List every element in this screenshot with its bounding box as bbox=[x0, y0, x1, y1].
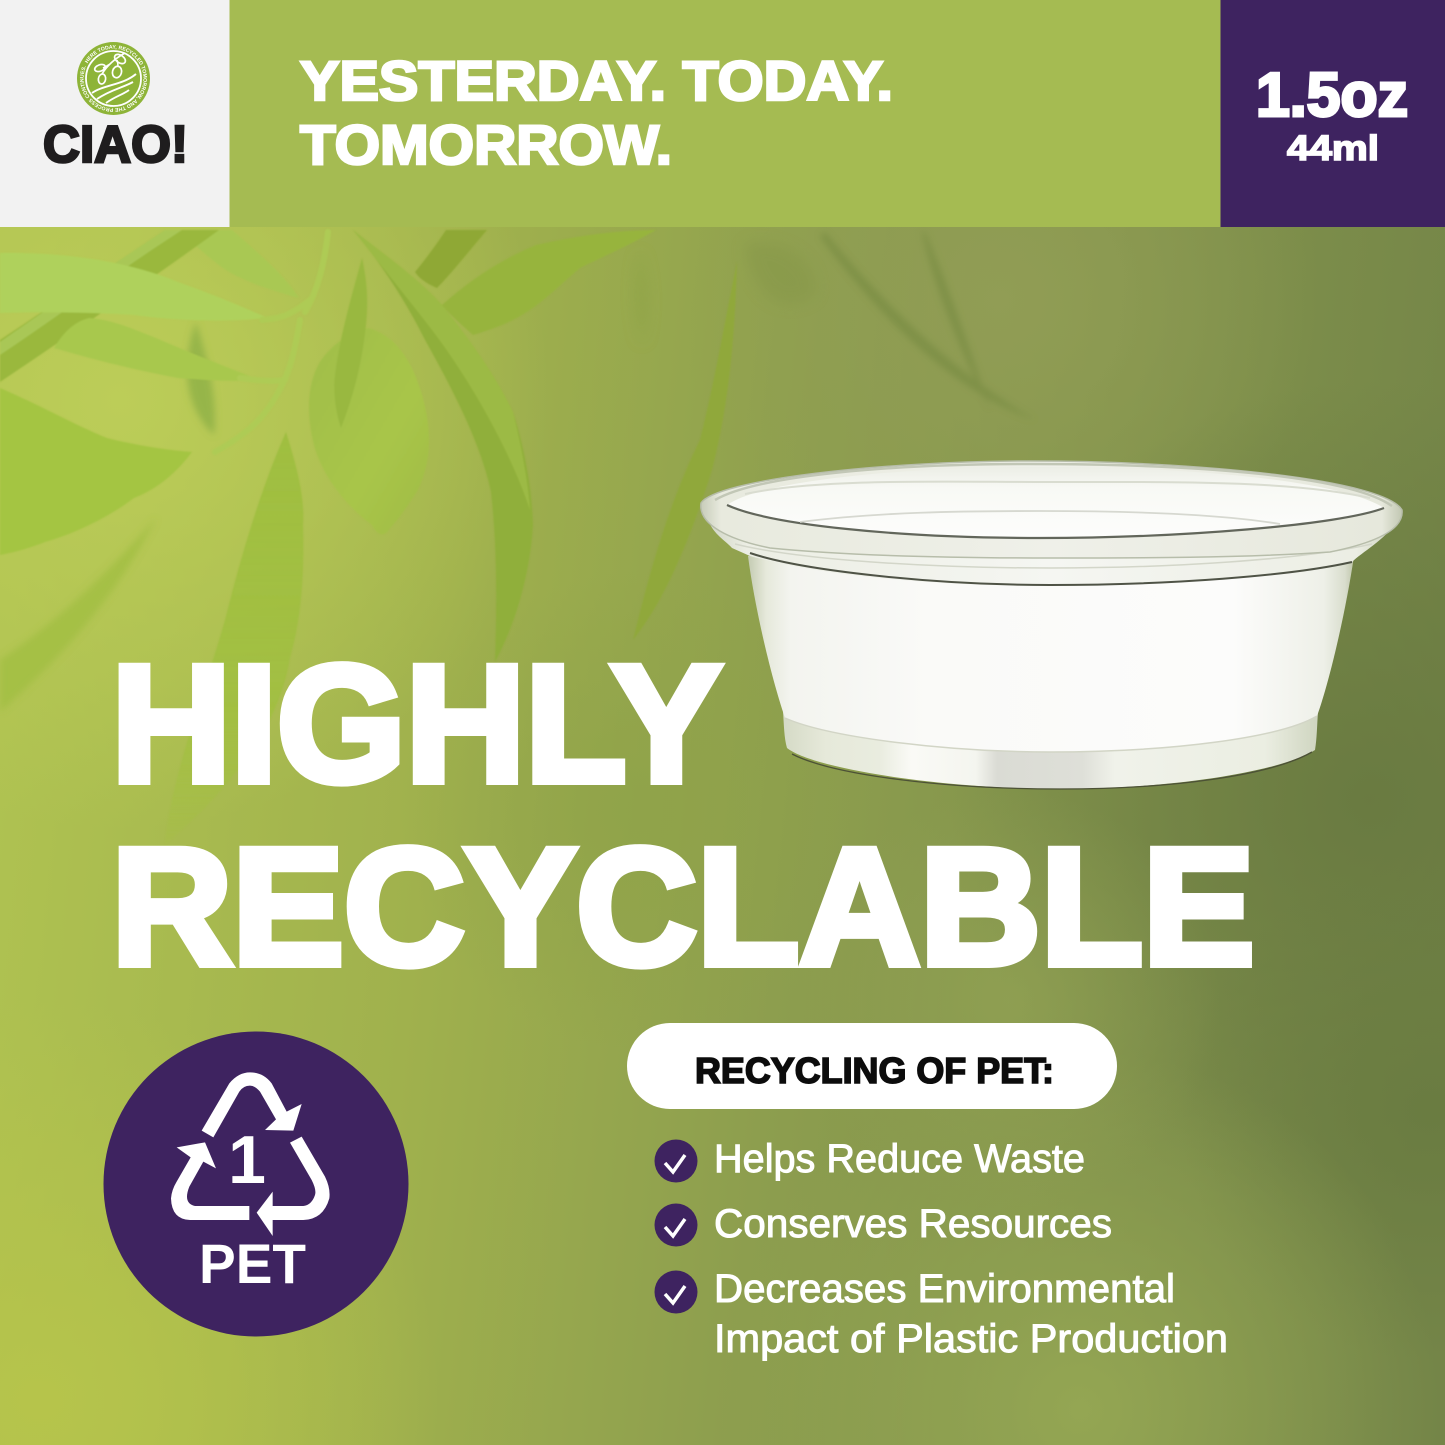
header panel: logo background bbox=[0, 0, 230, 227]
callout pill: recycling of PET heading bbox=[627, 1023, 1117, 1109]
size label: 1.5oz bbox=[1256, 61, 1408, 130]
logo: CIAO! brand bbox=[43, 42, 188, 174]
icon: round olive emblem: HERE TODAY, RECYCLED TOMORROW, AND THE PROCESS CONTINUES. bbox=[80, 45, 148, 112]
cup body bbox=[748, 556, 1354, 752]
size label: 44ml bbox=[1287, 129, 1379, 168]
cup opening bbox=[727, 467, 1384, 538]
cup rim bbox=[701, 461, 1402, 558]
main headline bbox=[112, 632, 1254, 1000]
logo wordmark: CIAO! bbox=[43, 116, 188, 174]
recycling number: 1 bbox=[228, 1122, 266, 1198]
recycling label: PET bbox=[199, 1232, 306, 1295]
benefit list bbox=[654, 1137, 1228, 1361]
badge: PET recycling code 1 bbox=[104, 1032, 408, 1336]
cup base bbox=[783, 712, 1318, 789]
cup collar bbox=[708, 520, 1396, 586]
tagline heading: TOMORROW. bbox=[300, 113, 672, 176]
header panel: tagline background bbox=[230, 0, 1220, 227]
benefit: conserves resources: Conserves Resources bbox=[714, 1202, 1112, 1246]
main headline: RECYCLABLE bbox=[112, 815, 1254, 1000]
benefit: decreases environmental impact: Decreases Environmental bbox=[714, 1267, 1175, 1311]
product: clear plastic portion cup bbox=[701, 461, 1402, 789]
icon: three chasing recycling arrows bbox=[171, 1072, 330, 1236]
benefit: decreases environmental impact: Impact of Plastic Production bbox=[714, 1317, 1228, 1361]
size label bbox=[1256, 61, 1408, 168]
benefit: decreases environmental impact bbox=[654, 1267, 1228, 1361]
benefit: helps reduce waste: Helps Reduce Waste bbox=[714, 1137, 1085, 1181]
tagline heading: YESTERDAY. TODAY. bbox=[300, 49, 893, 112]
header panel: size background bbox=[1220, 0, 1445, 227]
main headline: HIGHLY bbox=[112, 632, 722, 817]
tagline heading bbox=[300, 49, 893, 176]
callout pill: recycling of PET heading: RECYCLING OF PET: bbox=[695, 1050, 1054, 1091]
leaves bbox=[0, 230, 1035, 845]
